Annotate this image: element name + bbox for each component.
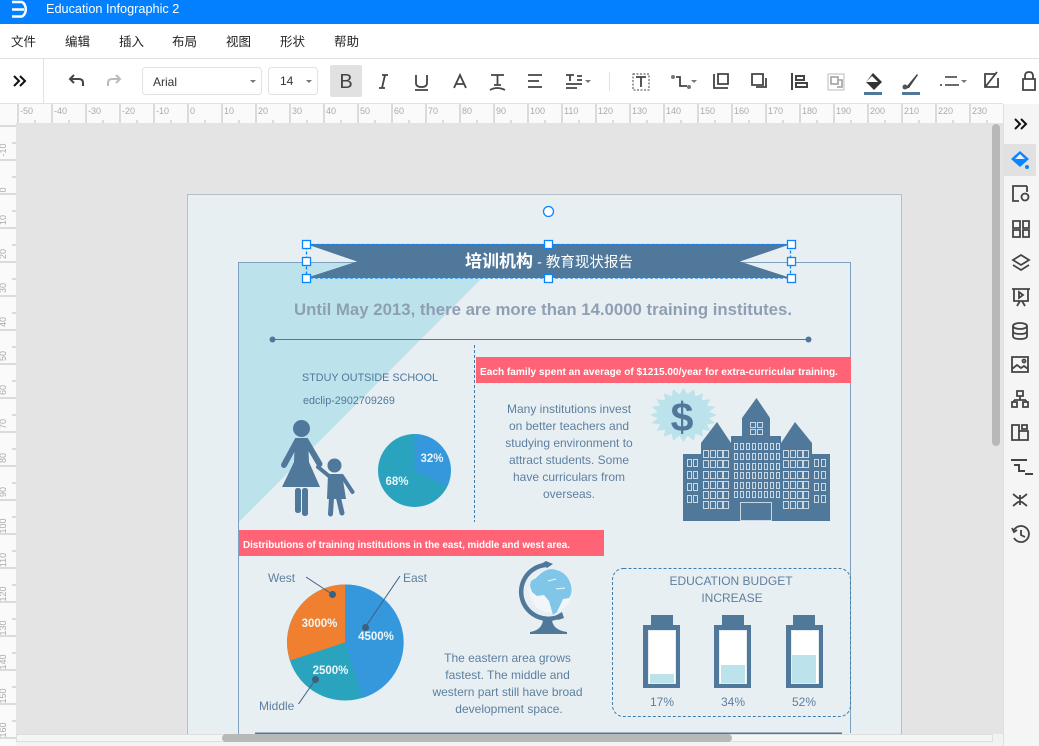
title ribbon	[306, 244, 791, 278]
panel: report frame	[238, 262, 850, 746]
top ruler: 80	[462, 106, 472, 116]
top ruler: 100	[530, 106, 545, 116]
panel: education budget	[612, 568, 850, 716]
top ruler: -20	[122, 106, 135, 116]
pie values	[302, 618, 394, 677]
icon: dollar badge	[650, 388, 717, 442]
top ruler: 30	[292, 106, 302, 116]
menu bar: 视图	[226, 34, 251, 49]
chart: pie study share	[378, 434, 451, 507]
text block: eastern area: The eastern area grows	[444, 651, 571, 665]
bottom section rule	[255, 732, 842, 734]
text format icons	[379, 72, 1035, 90]
section label: study outside school: edclip-2902709269	[303, 395, 395, 407]
top ruler: 230	[972, 106, 987, 116]
section label: study outside school	[302, 372, 438, 407]
icon: mother and child	[282, 420, 352, 516]
sidebar tool icons	[1011, 186, 1033, 542]
pie region labels: West	[268, 571, 296, 585]
text block: institutions: Many institutions invest	[507, 402, 632, 416]
bold button: B	[339, 71, 353, 93]
headline: Until May 2013, there are more than 14.0000 training institutes.	[294, 300, 792, 319]
top ruler: -40	[54, 106, 67, 116]
text block: eastern area: development space.	[455, 702, 563, 716]
icon: collapse	[14, 76, 25, 86]
budget heading: INCREASE	[701, 591, 763, 605]
pie region labels: Middle	[259, 699, 295, 713]
icon: globe	[521, 561, 572, 634]
top ruler: 70	[428, 106, 438, 116]
icons: undo redo	[70, 75, 83, 86]
top ruler	[0, 103, 1003, 123]
top ruler: 170	[768, 106, 783, 116]
menu bar	[0, 24, 1039, 59]
pie labels: 32%	[420, 453, 444, 465]
callout: family spending banner	[476, 357, 851, 383]
toolbar	[0, 59, 1039, 104]
section label: study outside school: STDUY OUTSIDE SCHOOL	[302, 372, 438, 384]
menu bar: 帮助	[334, 35, 359, 49]
connector arrows dropdown	[585, 75, 967, 89]
icon: school building	[683, 398, 830, 521]
top ruler: 0	[190, 106, 195, 116]
fill and stroke tools	[864, 73, 920, 95]
top ruler: 10	[224, 106, 234, 116]
pie region labels	[259, 571, 428, 713]
pie values: 3000%	[302, 618, 337, 630]
text block: institutions	[505, 402, 633, 501]
vertical dashed divider	[474, 345, 476, 522]
horizontal scrollbar	[16, 734, 1003, 746]
size selector	[268, 68, 318, 94]
top ruler: 50	[360, 106, 370, 116]
top ruler: 190	[836, 106, 851, 116]
top ruler: 200	[870, 106, 885, 116]
battery 34%: 34%	[721, 695, 745, 709]
battery 52%: 52%	[792, 695, 816, 709]
icon: dollar badge: $	[671, 394, 694, 440]
size selector: 14	[280, 74, 294, 88]
budget heading: EDUCATION BUDGET	[669, 574, 793, 588]
icon: collapse right	[1015, 119, 1026, 129]
callout: distribution banner: Distributions of training institutions in the east, middle and west area.	[243, 540, 570, 551]
top ruler: 220	[938, 106, 953, 116]
top ruler: 210	[904, 106, 919, 116]
pie values: 4500%	[358, 631, 394, 643]
selection handles	[302, 206, 796, 282]
pie labels: 68%	[385, 476, 409, 488]
pie region labels: East	[403, 571, 428, 585]
top ruler: 60	[394, 106, 404, 116]
chart: regional pie	[259, 571, 428, 713]
top ruler: 40	[326, 106, 336, 116]
battery 34%	[714, 615, 751, 709]
callout: family spending banner: Each family spent an average of $1215.00/year for extra-curricular training.	[480, 367, 838, 378]
document title: Education Infographic 2	[46, 2, 179, 16]
text block: eastern area	[431, 651, 583, 716]
title text: 培训机构 - 教育现状报告	[465, 251, 633, 271]
pie labels	[385, 453, 444, 488]
icon: app logo	[12, 2, 26, 16]
menu bar: 形状	[280, 35, 306, 49]
menu bar: 插入	[119, 35, 145, 49]
top ruler: 140	[666, 106, 681, 116]
text block: institutions: studying environment to	[505, 436, 633, 450]
bold button	[330, 65, 362, 97]
page sheet	[188, 194, 902, 746]
top ruler: 110	[564, 106, 578, 116]
budget heading	[669, 574, 793, 605]
top ruler: 130	[632, 106, 647, 116]
headline divider	[270, 336, 812, 342]
text block: institutions: have curriculars from	[513, 470, 625, 484]
top ruler: 120	[598, 106, 613, 116]
text block: eastern area: western part still have broad	[431, 685, 583, 699]
text block: institutions: overseas.	[543, 487, 595, 501]
pie leaders	[298, 576, 400, 704]
top ruler: 180	[802, 106, 817, 116]
title bar	[0, 0, 1039, 24]
right sidebar	[1003, 104, 1039, 746]
text block: institutions: attract students. Some	[509, 453, 629, 467]
text block: institutions: on better teachers and	[509, 419, 629, 433]
top ruler: 150	[700, 106, 715, 116]
font selector: Arial	[153, 75, 177, 89]
top ruler: 20	[258, 106, 268, 116]
top ruler: 90	[496, 106, 506, 116]
left ruler	[0, 123, 16, 746]
pie values: 2500%	[313, 665, 348, 677]
menu bar: 文件	[11, 34, 36, 49]
battery 17%	[643, 615, 680, 709]
vertical scrollbar	[992, 124, 1000, 446]
text block: eastern area: fastest. The middle and	[445, 668, 570, 682]
menu bar: 布局	[172, 35, 197, 49]
active fill tool	[1004, 144, 1036, 176]
top ruler: -10	[156, 106, 169, 116]
menu bar: 编辑	[65, 34, 90, 49]
top ruler: 160	[734, 106, 749, 116]
callout: distribution banner	[239, 530, 604, 556]
battery 52%	[786, 615, 823, 709]
battery 17%: 17%	[650, 695, 674, 709]
top ruler: -30	[88, 106, 101, 116]
top ruler: -50	[20, 106, 33, 116]
font selector	[142, 68, 262, 94]
